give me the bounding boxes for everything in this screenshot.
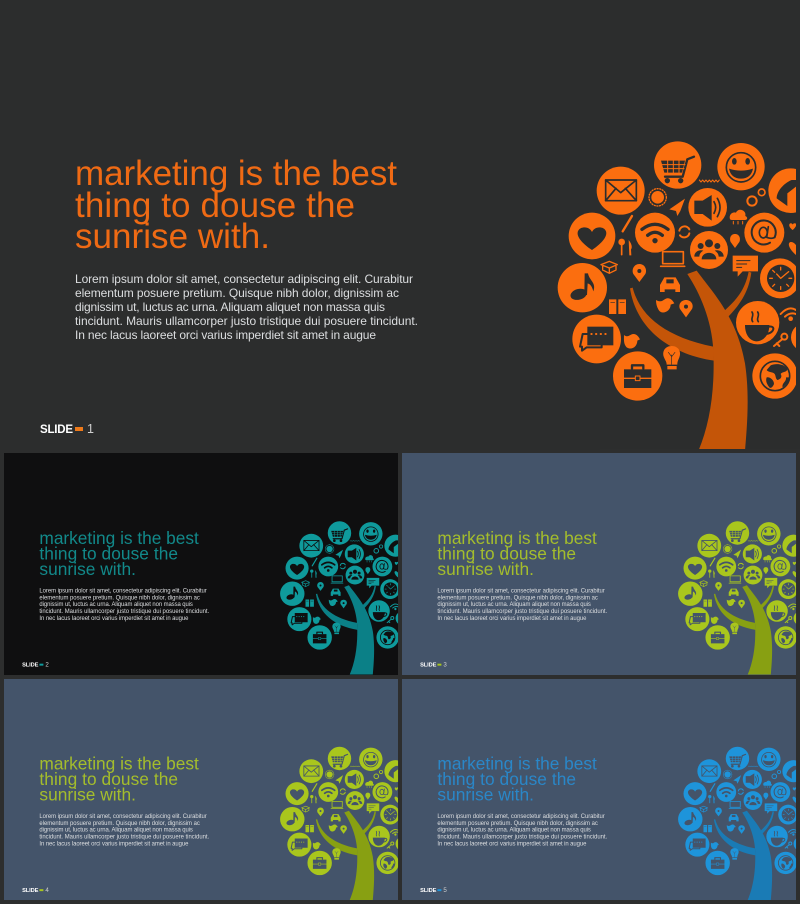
slide 5 label (420, 887, 447, 894)
slide 2: black teal slide (4, 453, 409, 675)
slide 3 title: sunrise with. (437, 559, 534, 579)
slide 2 body text: dignissim ut, luctus ac urna. Aliquam aliquet non massa quis (39, 602, 193, 608)
slide 3 body text: elementum posuere pretium. Quisque nibh dolor, dignissim ac (437, 595, 598, 601)
slide 4 body text: Lorem ipsum dolor sit amet, consectetur adipiscing elit. Curabitur (39, 814, 207, 820)
slide 4 title: marketing is the best (39, 753, 199, 773)
slide 3 background (402, 453, 796, 675)
slide 4 content (22, 747, 409, 900)
slide 3 icon tree (678, 521, 800, 675)
slide 5 body text: tincidunt. Mauris ullamcorper justo tristique dui posuere tincidunt. (437, 835, 608, 841)
slide 1 title: thing to douse the (75, 186, 355, 225)
slide 4 body text: tincidunt. Mauris ullamcorper justo tristique dui posuere tincidunt. (39, 835, 210, 841)
slide 1 title: sunrise with. (75, 217, 270, 256)
slide 1 label (40, 422, 94, 436)
slide 2 content (22, 521, 409, 675)
slide 2 title (39, 528, 199, 579)
slide 5 body text (437, 814, 608, 848)
slide 4 label (22, 887, 49, 894)
slide 2 label: 2 (45, 662, 49, 669)
slide 2 body text: tincidunt. Mauris ullamcorper justo tristique dui posuere tincidunt. (39, 609, 210, 615)
slide 5 label: 5 (443, 887, 447, 894)
slide 1 body text: Lorem ipsum dolor sit amet, consectetur adipiscing elit. Curabitur (75, 272, 413, 286)
slide 2 title: marketing is the best (39, 528, 199, 548)
slide 3 body text: Lorem ipsum dolor sit amet, consectetur adipiscing elit. Curabitur (437, 588, 605, 594)
slide 1 title (75, 154, 397, 256)
slide 3: slate lime slide (402, 453, 800, 675)
slide 5 title: sunrise with. (437, 785, 534, 805)
slide 3 label: SLIDE (420, 663, 437, 669)
slide 5 icon tree (678, 747, 800, 900)
slide 1: large orange slide (0, 0, 800, 453)
slide 2 icon tree (280, 521, 409, 675)
slide 4 label: 4 (45, 887, 49, 894)
slide 1 background (0, 0, 800, 450)
slide 5: slate blue slide (402, 679, 800, 900)
slide 2 body text: Lorem ipsum dolor sit amet, consectetur adipiscing elit. Curabitur (39, 588, 207, 594)
slide 5 title: marketing is the best (437, 753, 597, 773)
slide 4 background (4, 679, 398, 900)
slide 2 label: SLIDE (22, 663, 39, 669)
slide 2 body text: elementum posuere pretium. Quisque nibh dolor, dignissim ac (39, 595, 200, 601)
slide 3 label (420, 662, 447, 669)
slide 2 title: thing to douse the (39, 544, 178, 564)
slide 5 label: SLIDE (420, 888, 437, 894)
slide 5 title: thing to douse the (437, 769, 576, 789)
slide 1 body text: In nec lacus laoreet orci varius imperdiet sit amet in augue (75, 328, 376, 342)
slide 1 label: 1 (87, 422, 94, 436)
slide 3 body text: In nec lacus laoreet orci varius imperdiet sit amet in augue (437, 616, 587, 622)
slide 3 body text: dignissim ut, luctus ac urna. Aliquam aliquet non massa quis (437, 602, 591, 608)
slide 2 body text: In nec lacus laoreet orci varius imperdiet sit amet in augue (39, 616, 189, 622)
slide 1 body text (75, 272, 418, 342)
slide 1 body text: dignissim ut, luctus ac urna. Aliquam aliquet non massa quis (75, 300, 385, 314)
slide 2 title: sunrise with. (39, 559, 136, 579)
slide 1 title: marketing is the best (75, 154, 397, 193)
slide 3 title (437, 528, 597, 579)
slide 4 body text: dignissim ut, luctus ac urna. Aliquam aliquet non massa quis (39, 828, 193, 834)
slide 3 title: marketing is the best (437, 528, 597, 548)
slide 5 background (402, 679, 796, 900)
slide 3 body text (437, 588, 608, 622)
slide 4 body text (39, 814, 210, 848)
slide 3 title: thing to douse the (437, 544, 576, 564)
slide 4: slate lime slide (4, 679, 409, 900)
slide 4 label: SLIDE (22, 888, 39, 894)
slide 5 title (437, 753, 597, 805)
slide 4 body text: In nec lacus laoreet orci varius imperdiet sit amet in augue (39, 842, 189, 848)
slide 1 label: SLIDE (40, 424, 73, 436)
slide 4 title: thing to douse the (39, 769, 178, 789)
slide 4 title: sunrise with. (39, 785, 136, 805)
slide 5 content (420, 747, 800, 900)
slide 4 title (39, 753, 199, 805)
slide 1 body text: tincidunt. Mauris ullamcorper justo tristique dui posuere tincidunt. (75, 314, 418, 328)
slide 1 body text: elementum posuere pretium. Quisque nibh dolor, dignissim ac (75, 286, 399, 300)
slide 3 body text: tincidunt. Mauris ullamcorper justo tristique dui posuere tincidunt. (437, 609, 608, 615)
slide 5 body text: In nec lacus laoreet orci varius imperdiet sit amet in augue (437, 842, 587, 848)
slide 3 content (420, 521, 800, 675)
slide 5 body text: Lorem ipsum dolor sit amet, consectetur adipiscing elit. Curabitur (437, 814, 605, 820)
slide 2 background (4, 453, 398, 675)
slide 1 icon tree (558, 141, 800, 451)
slide 3 label: 3 (443, 662, 447, 669)
slide 5 body text: dignissim ut, luctus ac urna. Aliquam aliquet non massa quis (437, 828, 591, 834)
slide 4 body text: elementum posuere pretium. Quisque nibh dolor, dignissim ac (39, 821, 200, 827)
slide 5 body text: elementum posuere pretium. Quisque nibh dolor, dignissim ac (437, 821, 598, 827)
slide 2 body text (39, 588, 210, 622)
slide 2 label (22, 662, 49, 669)
slide 4 icon tree (280, 747, 409, 900)
